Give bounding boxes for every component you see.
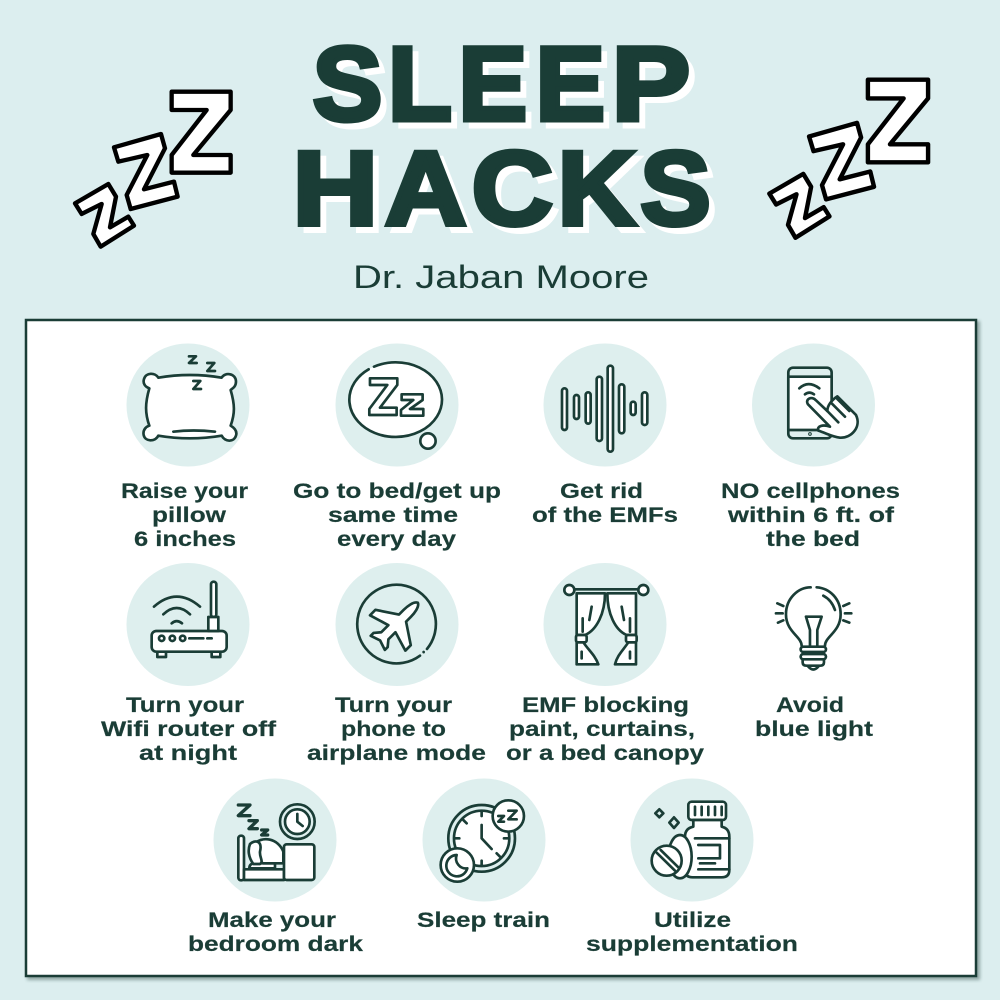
icon: sleeping in bed bbox=[238, 804, 315, 880]
label: Avoid bbox=[776, 694, 844, 717]
label: every day bbox=[337, 528, 456, 551]
label: bedroom dark bbox=[188, 933, 363, 956]
label bbox=[532, 480, 678, 527]
label bbox=[121, 480, 248, 551]
subtitle: author: Dr. Jaban Moore bbox=[353, 259, 649, 295]
icon: router bbox=[152, 582, 227, 657]
title: H bbox=[293, 129, 378, 247]
title: A bbox=[385, 129, 467, 247]
label: phone to bbox=[341, 718, 446, 741]
label: the bed bbox=[766, 528, 860, 551]
title: P bbox=[618, 31, 696, 148]
icon: left zzz bbox=[75, 92, 231, 247]
label: 6 inches bbox=[134, 528, 236, 551]
label bbox=[188, 909, 363, 956]
title: K bbox=[558, 129, 636, 247]
title: P bbox=[612, 25, 690, 142]
title: E bbox=[536, 25, 605, 142]
label: paint, curtains, bbox=[509, 718, 695, 741]
title: L bbox=[388, 25, 452, 142]
icon: pillow bbox=[143, 356, 236, 441]
label: of the EMFs bbox=[532, 504, 678, 527]
title: S bbox=[313, 25, 382, 142]
label: NO cellphones bbox=[721, 480, 900, 503]
label: Go to bed/get up bbox=[293, 480, 501, 503]
title: C bbox=[478, 135, 559, 253]
icon: phone and hand bbox=[788, 368, 858, 438]
item: airplane mode bbox=[307, 563, 486, 765]
label: pillow bbox=[152, 504, 227, 527]
label: Get rid bbox=[560, 480, 643, 503]
label: Utilize bbox=[654, 909, 731, 932]
label: EMF blocking bbox=[522, 694, 689, 717]
title bbox=[293, 25, 716, 253]
title: A bbox=[391, 135, 472, 253]
item: sleep train bbox=[417, 778, 550, 932]
title: E bbox=[464, 31, 533, 148]
title: L bbox=[394, 31, 458, 148]
title: S bbox=[319, 31, 388, 148]
title: E bbox=[541, 31, 611, 148]
title: C bbox=[472, 129, 553, 247]
icon: right zzz bbox=[769, 80, 928, 238]
icon: clock with moon and zz bbox=[441, 800, 524, 882]
item: blue light bbox=[755, 587, 873, 741]
label bbox=[721, 480, 900, 551]
label: same time bbox=[328, 504, 458, 527]
item: no cellphones bbox=[721, 344, 900, 551]
title: S bbox=[640, 129, 711, 247]
icon: light bulb bbox=[776, 587, 851, 669]
item: supplementation bbox=[586, 778, 798, 956]
label bbox=[586, 909, 798, 956]
item: EMFs bbox=[532, 344, 678, 527]
label: Make your bbox=[208, 909, 336, 932]
label: Turn your bbox=[126, 694, 244, 717]
title: E bbox=[459, 25, 527, 142]
item: EMF blocking bbox=[506, 563, 704, 765]
icon: airplane bbox=[357, 585, 436, 663]
item: wifi router bbox=[101, 563, 277, 765]
title: S bbox=[646, 135, 716, 253]
item: raise pillow bbox=[121, 344, 250, 551]
label bbox=[307, 694, 486, 765]
icon: pill bottle bbox=[652, 802, 729, 878]
label bbox=[293, 480, 501, 551]
label: at night bbox=[139, 742, 237, 765]
label: airplane mode bbox=[307, 742, 486, 765]
item: bed time bbox=[293, 344, 501, 551]
label: Wifi router off bbox=[101, 718, 277, 741]
label: supplementation bbox=[586, 933, 798, 956]
item: bedroom dark bbox=[188, 778, 363, 956]
label: Turn your bbox=[335, 694, 452, 717]
label: within 6 ft. of bbox=[727, 504, 895, 527]
label: blue light bbox=[755, 718, 873, 741]
icon: curtains bbox=[564, 585, 648, 664]
label: or a bed canopy bbox=[506, 742, 704, 765]
icon: sound waves bbox=[562, 366, 647, 452]
title: H bbox=[298, 135, 384, 253]
label bbox=[101, 694, 277, 765]
label: Raise your bbox=[121, 480, 248, 503]
panel: sleep hacks bbox=[26, 320, 980, 980]
label bbox=[755, 694, 873, 741]
label: Sleep train bbox=[417, 909, 550, 932]
label bbox=[506, 694, 704, 765]
icon: speech bubble zz bbox=[349, 362, 442, 449]
title: K bbox=[564, 135, 642, 253]
